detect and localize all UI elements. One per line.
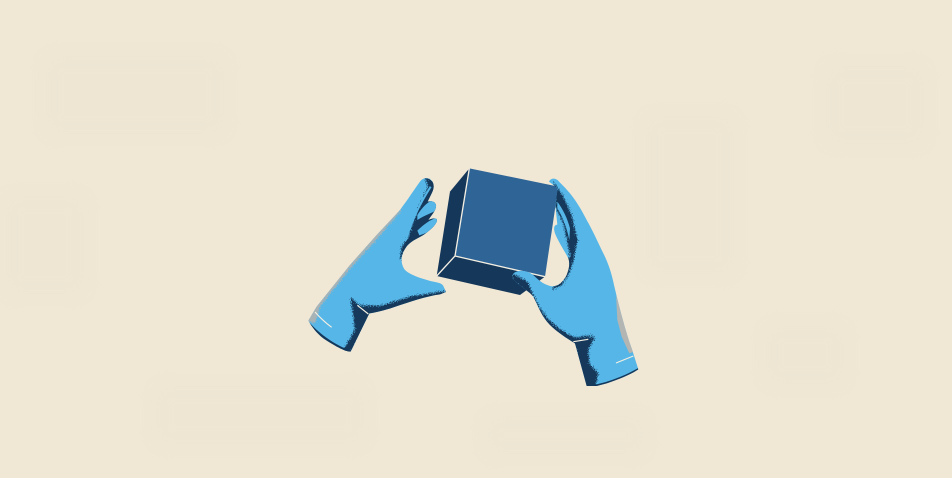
left finger highlights xyxy=(417,201,438,235)
right glove highlight xyxy=(573,339,633,363)
right finger shadows xyxy=(552,182,577,290)
right glove body xyxy=(510,173,643,390)
cube xyxy=(437,168,558,295)
right glove grey edge xyxy=(616,295,634,353)
left hand xyxy=(308,178,446,352)
right wrist shadow xyxy=(573,337,598,388)
left cuff shadow xyxy=(309,322,350,352)
illustration: gloved hands holding a cube xyxy=(308,168,638,386)
right cuff shadow xyxy=(595,368,638,386)
right thumb shadow xyxy=(512,273,593,345)
cube left face xyxy=(437,168,469,276)
right hand xyxy=(510,173,643,390)
cube highlight edges xyxy=(437,168,545,277)
left glove grey edge xyxy=(305,207,401,323)
cube bottom face xyxy=(437,256,545,295)
left finger shadows xyxy=(400,177,438,262)
left palm and wrist shadow xyxy=(343,291,447,355)
left glove highlight xyxy=(315,305,368,327)
left glove body xyxy=(308,178,446,352)
right finger highlights xyxy=(557,202,570,240)
cube front face xyxy=(455,168,558,277)
